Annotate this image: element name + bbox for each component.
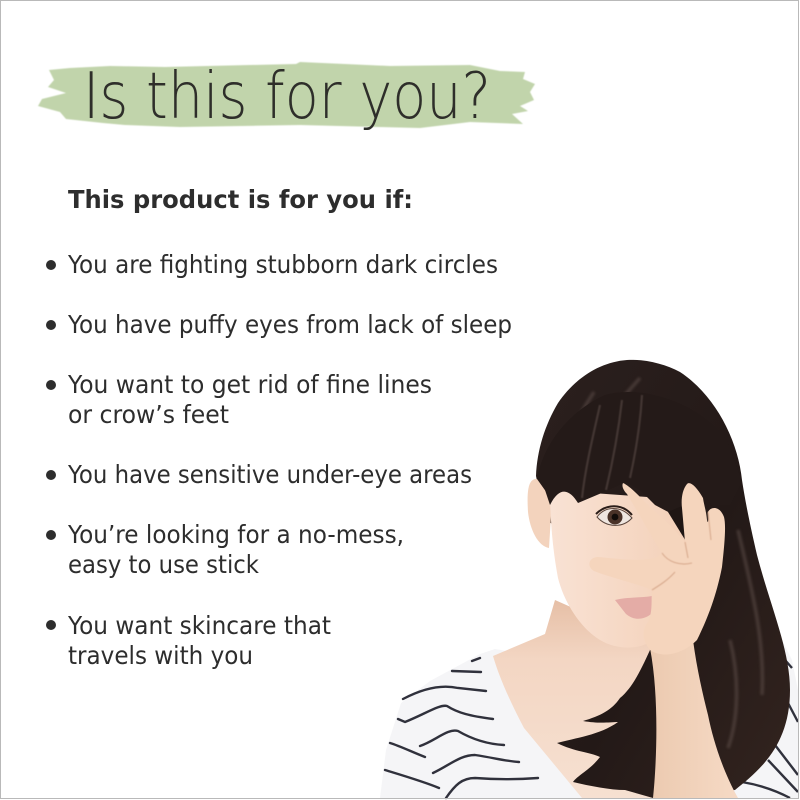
face [550, 490, 690, 648]
item: travel skincare: travels with you [68, 641, 253, 670]
item: fine lines: You want to get rid of fine lines [67, 370, 432, 399]
illustration: woman covering face with hand [380, 360, 798, 798]
item: fine lines [46, 370, 432, 429]
lips [615, 596, 652, 619]
ear [528, 479, 552, 548]
green brush stroke [38, 62, 535, 128]
subheading: This product is for you if: [68, 185, 413, 214]
arm [650, 640, 738, 798]
item: travel skincare [46, 611, 331, 670]
eye [596, 506, 632, 525]
bullet list [46, 250, 512, 670]
item: dark circles: You are fighting stubborn dark circles [67, 250, 498, 279]
neck and chest [493, 600, 690, 798]
item: no-mess stick: You’re looking for a no-mess, [67, 520, 404, 549]
hand [589, 483, 725, 655]
hair back [536, 360, 790, 798]
item: no-mess stick: easy to use stick [68, 550, 260, 579]
bangs [537, 392, 742, 514]
title text: Is this for you? [83, 60, 491, 134]
item: sensitive areas: You have sensitive under-eye areas [67, 460, 472, 489]
item: puffy eyes: You have puffy eyes from lack of sleep [67, 310, 512, 339]
fringe strands [582, 395, 642, 498]
title banner [38, 60, 535, 134]
item: no-mess stick [46, 520, 404, 579]
item: fine lines: or crow’s feet [68, 400, 229, 429]
shirt [380, 642, 798, 798]
gap between fingers [668, 506, 687, 543]
hair highlights [560, 378, 762, 748]
item: travel skincare: You want skincare that [67, 611, 331, 640]
